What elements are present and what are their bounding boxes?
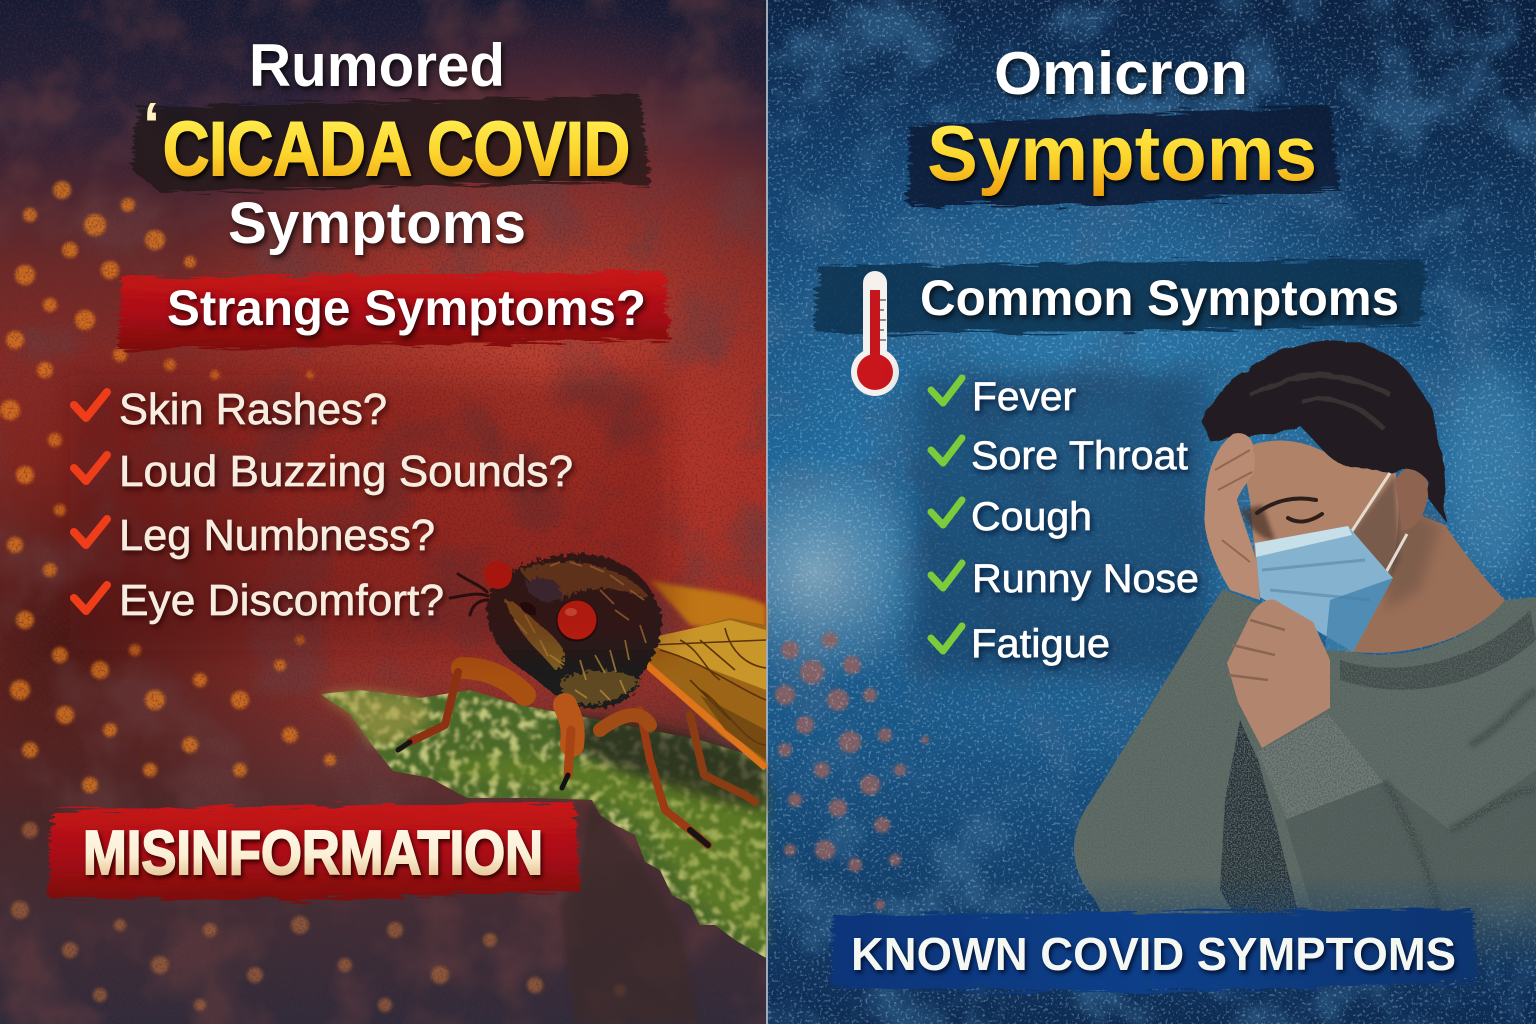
item: runny nose: Runny Nose — [972, 557, 1199, 601]
cicada wings — [632, 580, 766, 768]
cicada front legs — [398, 668, 573, 788]
mask straps — [1350, 473, 1407, 574]
banner: strange symptoms — [118, 271, 670, 350]
banner: misinformation — [48, 802, 580, 900]
banner: misinformation: MISINFORMATION — [83, 819, 543, 888]
item: skin rashes: Skin Rashes? — [119, 385, 387, 434]
banner: common symptoms: Common Symptoms — [920, 270, 1399, 326]
cicada illustration — [398, 554, 766, 845]
brush behind symptoms — [908, 105, 1340, 205]
heading: rumored cicada covid symptoms — [132, 32, 650, 256]
banner: known covid symptoms — [830, 909, 1477, 992]
heading: omicron symptoms — [908, 40, 1340, 205]
cicada furry body — [487, 554, 662, 709]
cicada back legs — [600, 710, 755, 845]
face — [1246, 440, 1398, 591]
item: eye discomfort: Eye Discomfort? — [119, 576, 444, 625]
heading: rumored cicada covid symptoms: ‘ — [143, 91, 160, 160]
banner: common symptoms — [815, 259, 1425, 333]
heading: omicron symptoms: Symptoms — [927, 109, 1317, 197]
heading: rumored cicada covid symptoms: Symptoms — [228, 191, 526, 256]
omicron symptom list — [912, 372, 1212, 677]
item: fatigue: Fatigue — [971, 622, 1110, 666]
item: fever: Fever — [972, 375, 1076, 419]
divider between panels — [766, 0, 768, 1024]
hair — [1203, 341, 1447, 523]
panel: omicron symptoms background — [768, 0, 1536, 1024]
surgical mask — [1255, 526, 1393, 652]
cicada red eyes — [484, 561, 598, 642]
stubble shadow — [1353, 476, 1401, 577]
cicada antennae — [450, 574, 488, 615]
item: sore throat: Sore Throat — [971, 434, 1188, 478]
cicada fur strands — [515, 562, 646, 700]
fist near mask — [1227, 600, 1330, 748]
item: cough: Cough — [971, 495, 1092, 539]
icon: thermometer — [851, 271, 899, 396]
heading: rumored cicada covid symptoms: Rumored — [249, 32, 505, 99]
panel: rumored cicada covid background — [0, 0, 766, 1024]
leaf under cicada — [320, 690, 766, 1024]
item: leg numbness: Leg Numbness? — [119, 511, 435, 560]
item: loud buzzing sounds: Loud Buzzing Sounds? — [119, 447, 573, 496]
rumored symptom list — [70, 375, 670, 650]
sweater — [1074, 589, 1536, 970]
sweater cuff — [1257, 713, 1383, 819]
heading: omicron symptoms: Omicron — [994, 40, 1248, 107]
raised hand on forehead — [1204, 433, 1260, 600]
ear — [1395, 467, 1428, 530]
banner: strange symptoms: Strange Symptoms? — [167, 280, 646, 336]
illustration: man in mask holding head and coughing — [1074, 341, 1536, 970]
neck — [1345, 505, 1505, 653]
banner: known covid symptoms: KNOWN COVID SYMPTOMS — [851, 928, 1456, 980]
brush behind cicada covid — [132, 95, 650, 192]
heading: rumored cicada covid symptoms: CICADA COVID — [163, 107, 630, 192]
closed eye and brow — [1257, 499, 1322, 521]
